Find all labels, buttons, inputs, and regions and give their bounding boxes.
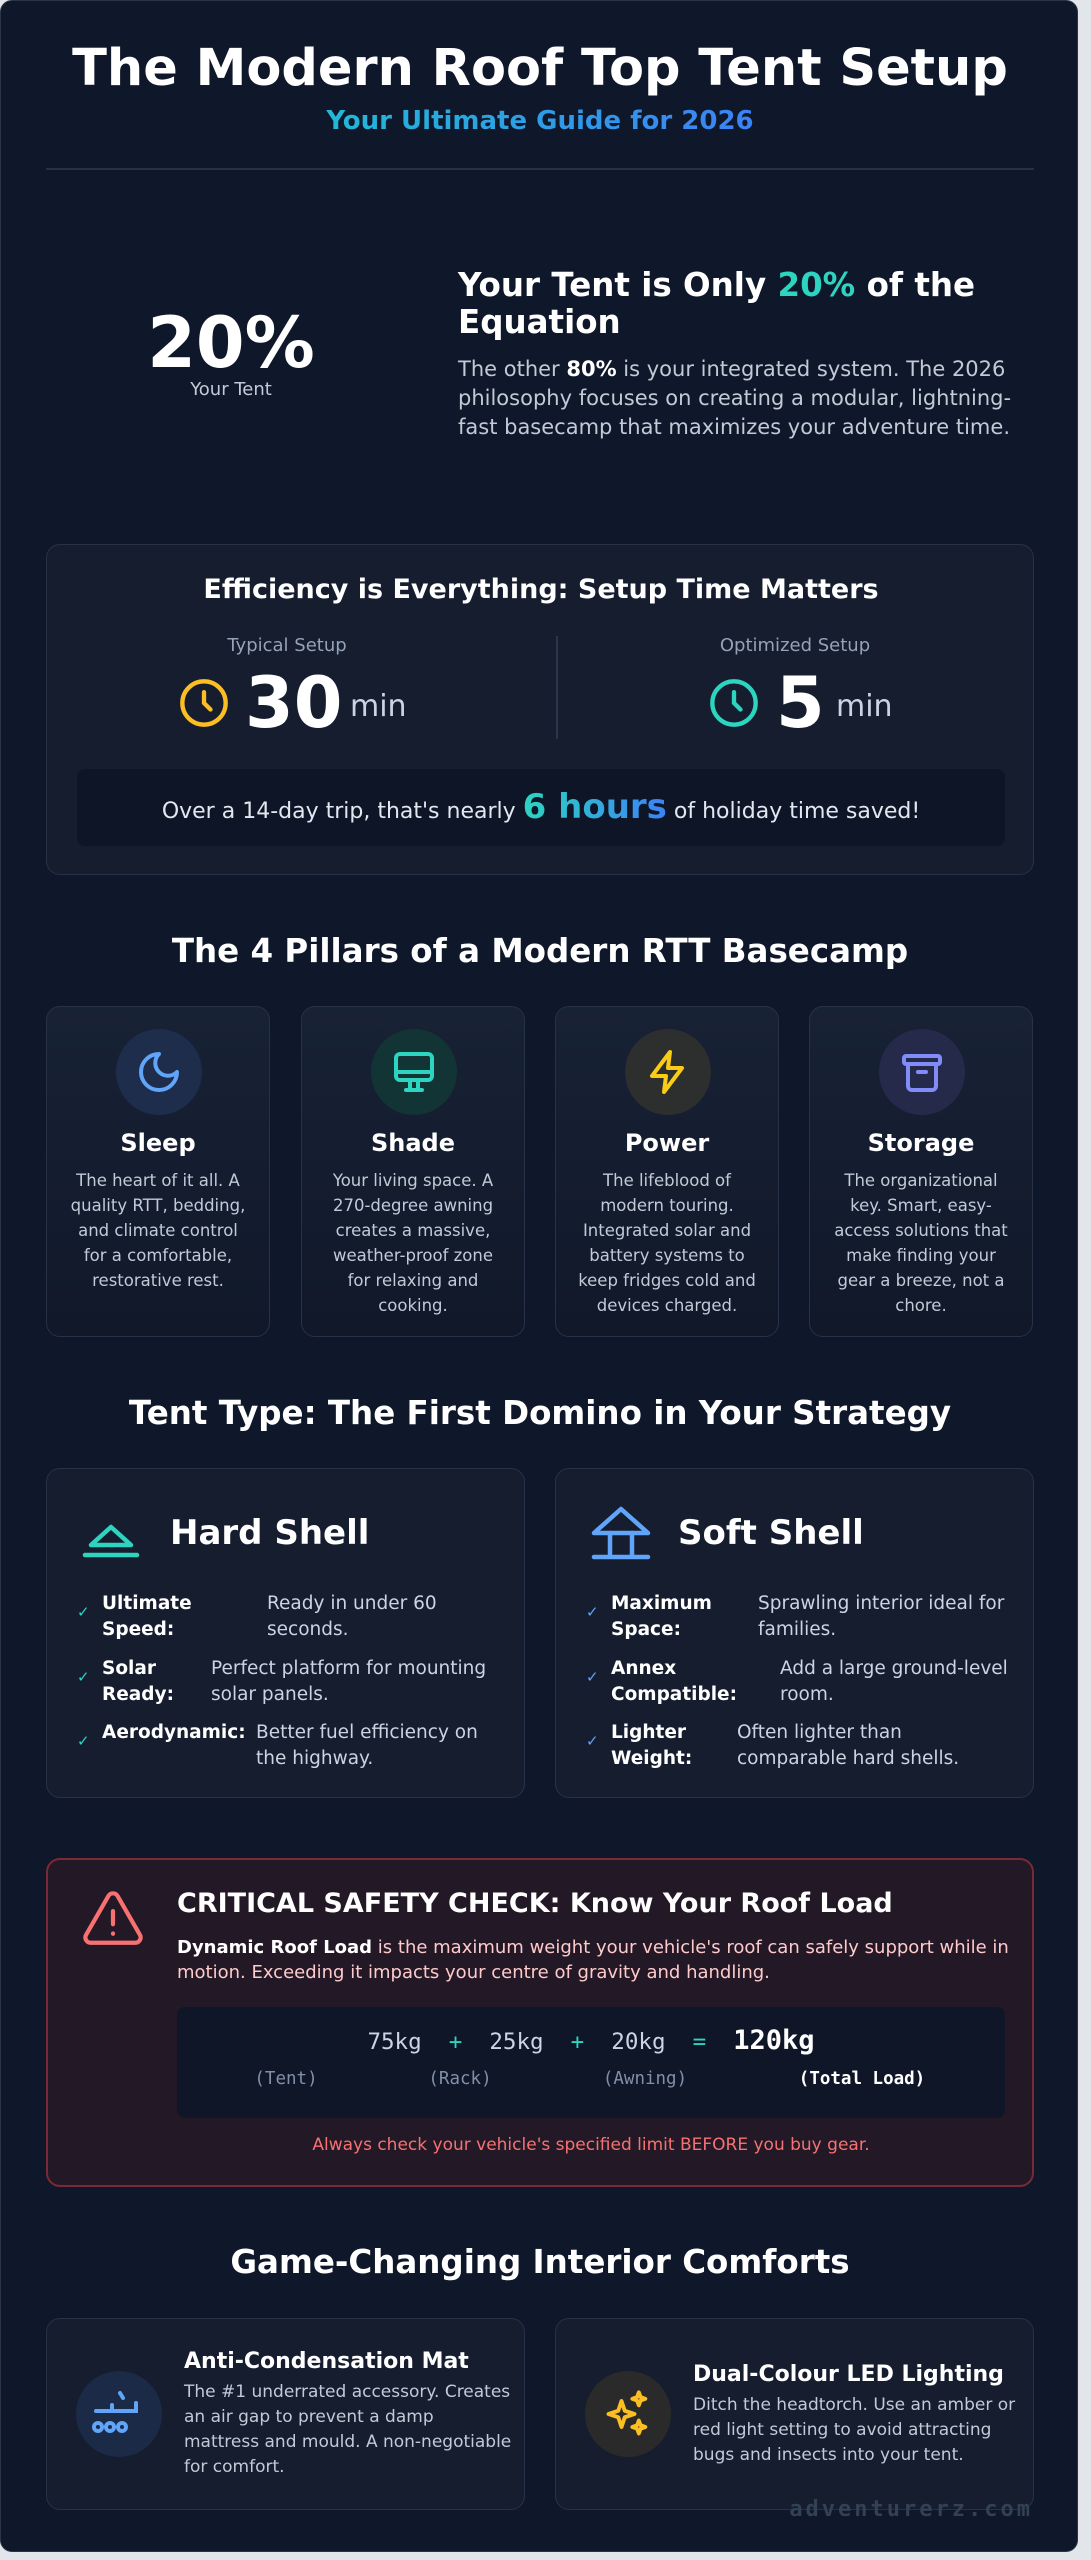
icon: hard shell xyxy=(82,1524,140,1558)
icon: moon xyxy=(116,1029,202,1115)
icon: clock teal xyxy=(710,679,758,727)
item list: Ready: xyxy=(102,1684,174,1705)
paragraph: 80%: The other 80% is your integrated system. The 2026 philosophy focuses on creating a modular, lightning-fast basecamp that maximizes your adventure time. xyxy=(458,357,1011,439)
item list: Weight: xyxy=(611,1748,692,1769)
title: Dual-Colour LED Lighting xyxy=(693,2362,1004,2387)
item list: ✓ xyxy=(586,1603,599,1621)
icon: soft shell xyxy=(592,1506,650,1560)
item list: ✓ xyxy=(77,1732,90,1750)
typical setup xyxy=(180,635,407,744)
title: Hard Shell xyxy=(170,1513,369,1553)
formula box: (Total Load) xyxy=(799,2069,925,2089)
subtitle: Your Ultimate Guide for 2026 xyxy=(326,106,754,136)
optimized setup: min xyxy=(836,689,893,724)
heading: Efficiency is Everything: Setup Time Matters xyxy=(203,574,879,605)
pillar: storage: Storage xyxy=(868,1129,974,1157)
icon: bolt xyxy=(625,1029,711,1115)
formula box: (Rack) xyxy=(428,2069,492,2089)
item list: Maximum xyxy=(611,1593,712,1614)
pillar: shade xyxy=(301,1006,525,1337)
item list: Annex xyxy=(611,1658,676,1679)
item list: seconds. xyxy=(267,1619,348,1640)
pillar: power xyxy=(555,1006,779,1337)
heading: tent type: Tent Type: The First Domino in Your Strategy xyxy=(129,1394,951,1432)
item list xyxy=(586,1593,1008,1769)
pillar: shade: Your living space. A 270-degree awning creates a massive, weather-proof zone for relaxing and cooking. xyxy=(333,1171,493,1315)
formula box xyxy=(177,2007,1005,2118)
icon: clock yellow xyxy=(180,679,228,727)
icon: archive box xyxy=(879,1029,965,1115)
pillar: shade: Shade xyxy=(371,1129,455,1157)
item list: Lighter xyxy=(611,1722,686,1743)
item list xyxy=(77,1593,486,1769)
card: anti-condensation mat xyxy=(46,2318,525,2510)
item list: Aerodynamic: xyxy=(102,1722,246,1743)
item list: Often lighter than xyxy=(737,1722,902,1743)
card: LED lighting xyxy=(555,2318,1034,2510)
item list: Sprawling interior ideal for xyxy=(758,1593,1004,1614)
typical setup: 30 xyxy=(245,662,342,744)
item list: families. xyxy=(758,1619,836,1640)
panel: soft shell xyxy=(555,1468,1034,1798)
paragraph: Dynamic Roof Load is the maximum weight your vehicle's roof can safely support while in motion. Exceeding it impacts your centre of gravity and handling. xyxy=(177,1937,1009,1983)
formula box: (Awning) xyxy=(603,2069,687,2089)
panel: efficiency xyxy=(46,544,1034,875)
title: Soft Shell xyxy=(678,1513,864,1553)
note: Always check your vehicle's specified limit BEFORE you buy gear. xyxy=(312,2135,870,2155)
callout: hours saved xyxy=(77,769,1005,846)
item list: Perfect platform for mounting xyxy=(211,1658,486,1679)
typical setup: min xyxy=(350,689,407,724)
item list: ✓ xyxy=(586,1668,599,1686)
panel: hard shell xyxy=(46,1468,525,1798)
item list: Space: xyxy=(611,1619,681,1640)
item list: room. xyxy=(780,1684,834,1705)
pillar: storage xyxy=(809,1006,1033,1337)
pillar: sleep: The heart of it all. A quality RTT, bedding, and climate control for a comfortable, restorative rest. xyxy=(71,1171,245,1290)
icon: sparkles xyxy=(585,2371,671,2457)
stat: 20%: 20% xyxy=(147,302,315,384)
pillar: storage: The organizational key. Smart, easy-access solutions that make finding your gear a breeze, not a chore. xyxy=(834,1171,1008,1315)
item list: Speed: xyxy=(102,1619,174,1640)
heading: tent is 20%: Your Tent is Only 20% of the Equation xyxy=(458,266,975,341)
item list: Ready in under 60 xyxy=(267,1593,437,1614)
heading: 4 pillars: The 4 Pillars of a Modern RTT Basecamp xyxy=(172,932,908,970)
icon: mat xyxy=(76,2371,162,2457)
item list: Compatible: xyxy=(611,1684,737,1705)
heading: CRITICAL SAFETY CHECK: Know Your Roof Load xyxy=(177,1888,893,1919)
item list: the highway. xyxy=(256,1748,373,1769)
text: The #1 underrated accessory. Creates an air gap to prevent a damp mattress and mould. A non-negotiable for comfort. xyxy=(184,2382,511,2477)
pillar: sleep: Sleep xyxy=(120,1129,196,1157)
optimized setup: 5 xyxy=(776,662,825,744)
icon: monitor xyxy=(371,1029,457,1115)
text: Ditch the headtorch. Use an amber or red light setting to avoid attracting bugs and insects into your tent. xyxy=(693,2395,1015,2465)
formula box: (Tent) xyxy=(254,2069,318,2089)
pillar: sleep xyxy=(46,1006,270,1337)
item list: Ultimate xyxy=(102,1593,192,1614)
watermark: adventurerz.com xyxy=(789,2497,1033,2522)
panel: safety check xyxy=(46,1858,1034,2187)
item list: comparable hard shells. xyxy=(737,1748,959,1769)
title: The Modern Roof Top Tent Setup xyxy=(72,39,1008,98)
optimized setup xyxy=(710,635,893,744)
title: Anti-Condensation Mat xyxy=(184,2349,469,2374)
optimized setup: Optimized Setup xyxy=(720,635,870,656)
item list: solar panels. xyxy=(211,1684,329,1705)
formula box: 75kg + 25kg + 20kg = 120kg xyxy=(367,2025,815,2056)
callout: hours saved: Over a 14-day trip, that's nearly 6 hours of holiday time saved! xyxy=(162,787,920,827)
typical setup: Typical Setup xyxy=(227,635,347,656)
pillar: power: Power xyxy=(625,1129,709,1157)
icon: warning xyxy=(83,1891,143,1945)
heading: interior comforts: Game-Changing Interior Comforts xyxy=(230,2243,850,2281)
item list: Add a large ground-level xyxy=(780,1658,1008,1679)
item list: ✓ xyxy=(586,1732,599,1750)
stat: 20%: Your Tent xyxy=(190,379,272,400)
item list: Better fuel efficiency on xyxy=(256,1722,478,1743)
pillar: power: The lifeblood of modern touring. Integrated solar and battery systems to keep fridges cold and devices charged. xyxy=(578,1171,756,1315)
item list: ✓ xyxy=(77,1603,90,1621)
item list: Solar xyxy=(102,1658,156,1679)
item list: ✓ xyxy=(77,1668,90,1686)
